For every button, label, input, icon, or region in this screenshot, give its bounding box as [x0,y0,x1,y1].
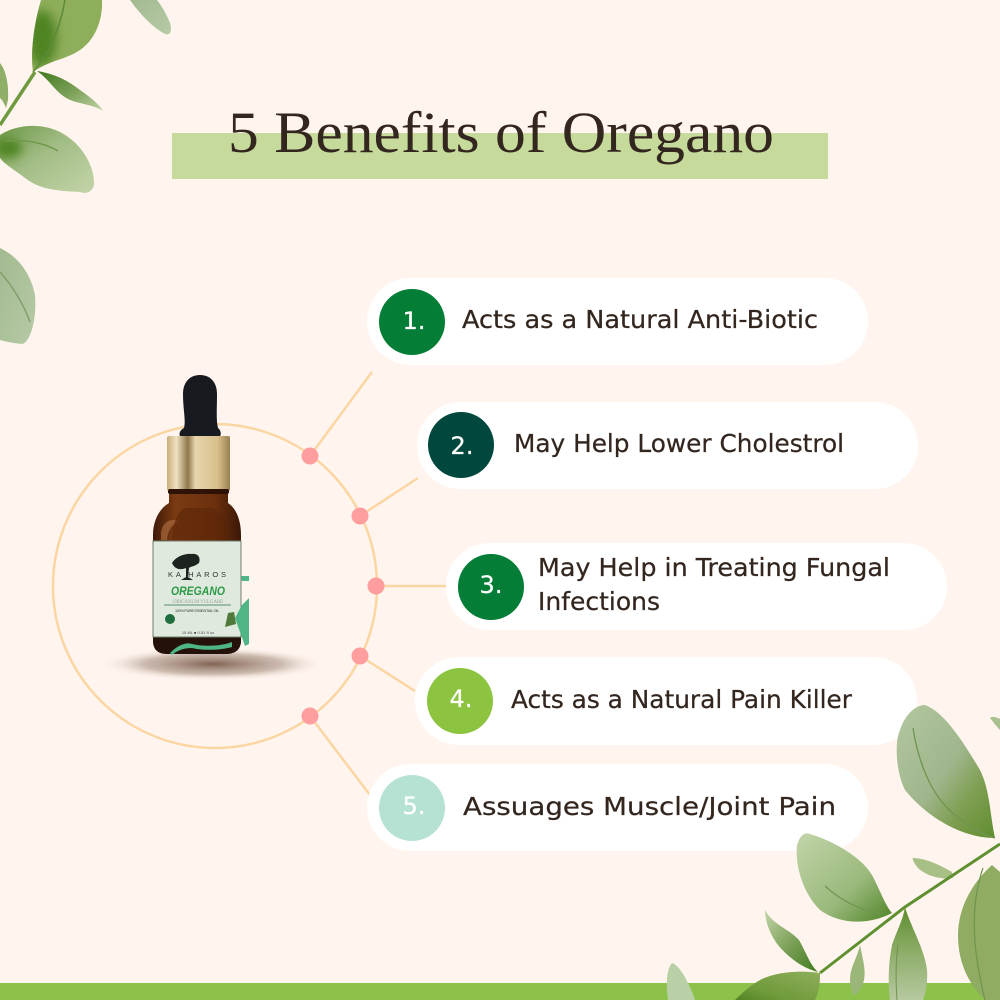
pill [446,543,947,630]
latin name: ORIGANUM VULGARE [173,600,223,605]
bottom-right leaf branch [667,705,1000,1000]
badge [165,614,175,624]
brand name: KA HAROS [168,570,226,579]
gold collar [167,436,230,491]
amber glass [153,489,241,654]
left edge leaf [0,248,35,344]
label: May Help Lower Cholestrol [514,429,844,458]
torn green scrap [170,576,249,655]
herb sprig [225,612,236,627]
number: 1. [403,307,425,335]
product name: OREGANO [171,584,226,598]
label: Assuages Muscle/Joint Pain [463,792,836,821]
purity line: 100% PURE ESSENTIAL OIL [175,609,219,613]
benefit 5 [367,764,868,851]
label: Acts as a Natural Anti-Biotic [462,305,818,334]
oil level [172,508,229,540]
pill [367,278,868,365]
connector lines [310,372,446,795]
title: 5 Benefits of Oregano [228,100,774,165]
pill [367,764,868,851]
benefit 4 [415,657,917,745]
number: 4. [450,685,472,713]
oregano oil bottle [153,375,249,655]
glass highlight [161,520,178,540]
label [153,541,241,637]
benefit 2 [417,402,918,489]
number badge [379,775,445,841]
bottle shadow [98,647,328,681]
number badge [428,412,494,478]
number badge [458,554,524,620]
label: Acts as a Natural Pain Killer [511,685,853,714]
connector dots [302,448,384,724]
volume: 15 ML ■ 0.51 fl oz [182,631,214,635]
number: 3. [480,571,502,599]
pill [415,657,917,745]
label: May Help in Treating Fungal [538,553,890,582]
title highlight bar [172,133,828,179]
number badge [427,668,493,734]
top-left leaf cluster [0,0,171,193]
tree logo [172,554,200,580]
benefit 1 [367,278,868,365]
glass lip [168,489,229,494]
benefit 3 [446,543,947,630]
pill [417,402,918,489]
bottom green band [0,983,1000,1000]
dark base [153,630,241,654]
dropper bulb [180,375,221,438]
number: 2. [451,432,473,460]
label: Infections [538,587,660,616]
connector ring [53,424,377,748]
number badge [379,289,445,355]
number: 5. [403,792,425,820]
